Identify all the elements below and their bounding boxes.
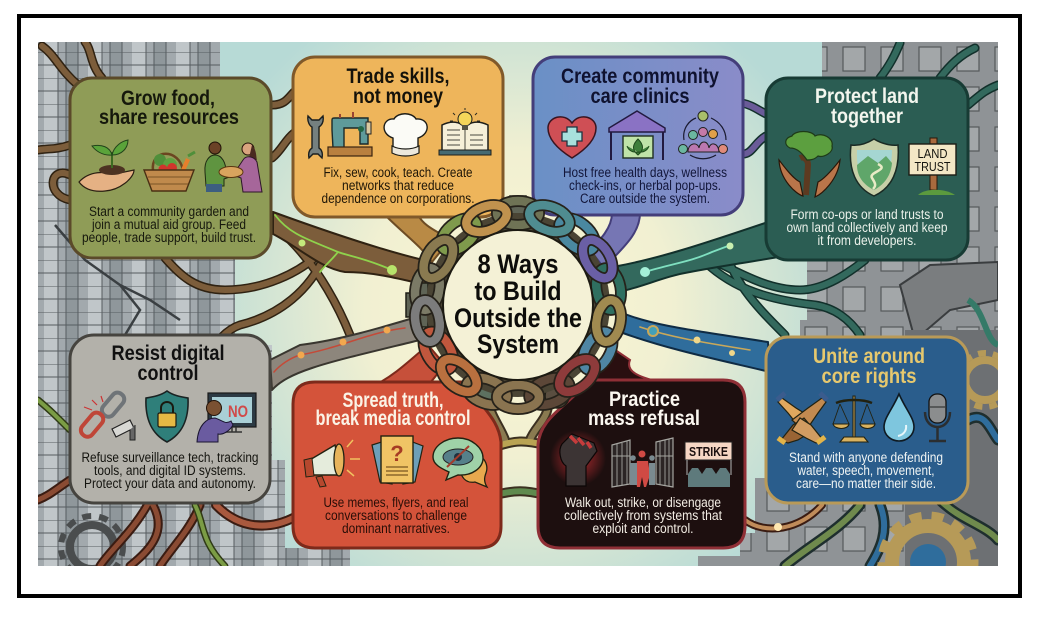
heading: care clinics: care clinics [590,85,690,108]
panel: resist digital control [70,335,270,503]
panel: core rights [766,337,968,503]
icon: hands holding tree [779,132,840,197]
icon: sewing machine [328,112,372,156]
roots: grey trunk [270,316,420,390]
roots: teal trunk [618,43,998,335]
icon: hand with sprout [79,140,134,191]
icon: water drop [884,394,914,441]
heading: spread truth: break media control [316,407,470,430]
ruined city: left [38,42,350,578]
central chain ring [406,196,624,410]
heading: trade skills [346,65,450,108]
icon: microphone [925,394,950,441]
heading: protect land [815,85,919,128]
title [454,249,582,359]
text: trade skills: dependence on corporations. [322,191,474,206]
text: mass refusal [564,495,722,536]
title: 8 Ways [478,249,558,279]
text: care clinics [563,165,727,206]
text: care clinics: Care outside the system. [580,191,710,206]
icon: land trust sign [909,138,956,195]
text: protect land: Form co-ops or land trusts to [790,207,944,222]
roots: green trunk [38,42,432,345]
title: to Build [474,276,562,306]
roots: red tail [381,348,440,380]
heading: mass refusal [588,388,700,430]
heading: care clinics [561,65,719,108]
roots: blue tail [595,216,641,264]
icon: people sharing bread [205,142,262,192]
roots: navy trunk [620,312,770,372]
heading: core rights: Unite around [813,345,925,368]
text: spread truth: dominant narratives. [342,521,450,536]
text: protect land [786,207,948,248]
heading: spread truth: Spread truth, [342,389,444,412]
roots: yellow tail [387,218,440,262]
text: resist digital control [82,450,258,491]
icon: heart with cross [548,117,596,158]
heading: core rights: core rights [822,365,916,388]
icon: person refusing at screen: NO [228,402,248,421]
center disc [443,230,593,380]
text: mass refusal: Walk out, strike, or disengage [565,495,721,510]
heading: mass refusal: Practice [609,388,680,411]
heading: spread truth [316,389,470,430]
text: core rights [789,450,943,491]
text: trade skills: networks that reduce [342,178,454,193]
icon: person refusing at screen [197,393,256,442]
icon: question flyers: ? [390,441,404,466]
text: spread truth: conversations to challenge [325,508,467,523]
icon: open gates with people [612,438,673,487]
text: mass refusal: exploit and control. [592,521,694,536]
icon: wrench [308,116,323,158]
text: protect land: own land collectively and keep [786,220,948,235]
text: care clinics: Host free health days, wellness [563,165,727,180]
text: grow food: people, trade support, build trust. [82,230,256,245]
icon: vegetable basket [144,152,195,191]
roots: lower links [38,395,998,566]
icon: megaphone [304,440,360,487]
icon: question flyers [372,436,423,484]
panel: grow food [70,78,271,258]
heading: resist digital control: Resist digital [112,342,224,365]
gear: gold lower right [878,512,978,566]
icon: community circle [678,111,728,159]
icon: strike banner: STRIKE [689,444,728,459]
panel: protect land [766,78,968,260]
text: spread truth: Use memes, flyers, and real [324,495,468,510]
text: trade skills: Fix, sew, cook, teach. Create [324,165,472,180]
gears behind ring [406,196,569,408]
panel: mass refusal [538,380,745,548]
heading: resist digital control: control [138,362,198,385]
icon: speech bubbles with crossed eye [433,438,487,487]
title: System [477,329,559,359]
text: grow food: Start a community garden and [89,204,249,219]
text: protect land: it from developers. [818,233,916,248]
icon: tent with herb [609,111,665,160]
text: trade skills [322,165,474,206]
icon: landscape shield [850,139,898,196]
heading: protect land: together [831,105,903,128]
panel: trade skills [293,57,503,217]
heading: core rights [813,345,925,388]
panel: spread truth [293,382,501,548]
text: spread truth [324,495,468,536]
text: grow food [82,204,256,245]
text: core rights: care—no matter their side. [796,476,936,491]
text: core rights: Stand with anyone defending [789,450,943,465]
text: resist digital control: tools, and digital ID systems. [94,463,246,478]
heading: protect land: Protect land [815,85,919,108]
title: Outside the [454,303,582,333]
heading: grow food [99,87,239,129]
heading: trade skills: not money [353,85,443,108]
panel: care clinics [533,57,743,215]
icon: raised fist [550,430,606,486]
icon: scales of justice [833,396,875,442]
icon: strike banner [685,442,732,487]
heading: mass refusal: mass refusal [588,407,700,430]
icon: open book with bulb [439,108,491,155]
chain links [412,200,624,410]
text: resist digital control: Refuse surveillance tech, tracking [82,450,258,465]
gear: gold right edge [966,298,998,410]
text: mass refusal: collectively from systems that [564,508,722,523]
icon: padlock shield [146,391,188,442]
text: grow food: join a mutual aid group. Feed [91,217,246,232]
icon: broken chain and camera [78,390,135,440]
text: care clinics: check-ins, or herbal pop-ups. [569,178,721,193]
icon: land trust sign: LAND [918,147,948,161]
icon: joined hands [777,393,827,443]
heading: trade skills: Trade skills, [346,65,450,88]
heading: grow food: Grow food, [121,87,215,110]
text: core rights: water, speech, movement, [797,463,934,478]
icon: land trust sign: TRUST [914,160,951,174]
heading: resist digital control [112,342,224,385]
roots: black tail [598,348,650,378]
heading: grow food: share resources [99,106,239,129]
text: resist digital control: Protect your data and autonomy. [84,476,256,491]
icon: chef hat [384,114,427,156]
ruined city: right [698,42,998,566]
heading: care clinics: Create community [561,65,719,88]
